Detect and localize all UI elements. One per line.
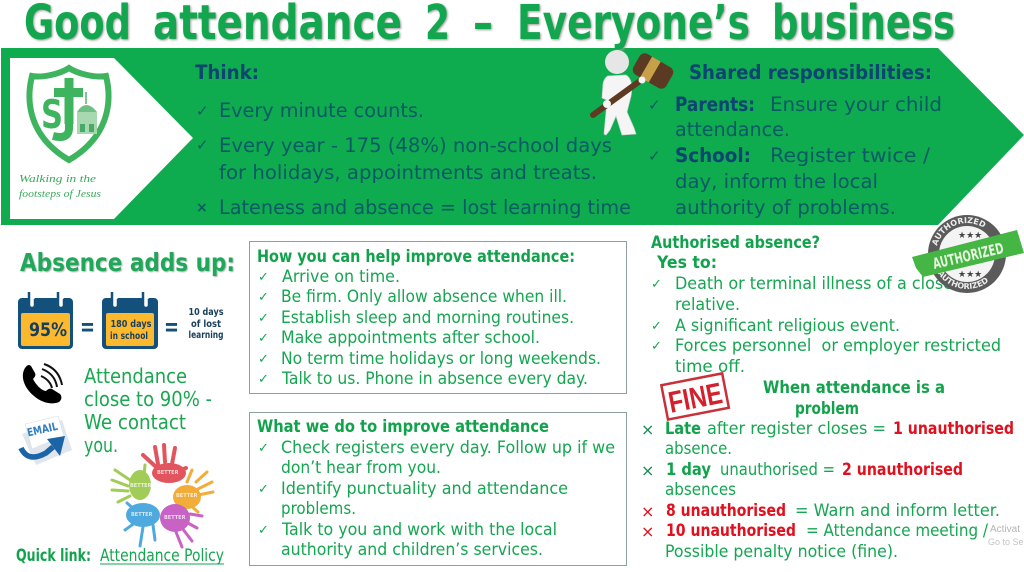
text block: problem thresholds: Possible penalty notice (fine). [665,542,898,561]
text block: think [195,61,631,219]
text: quick link: Attendance Policy [100,546,224,565]
text block: shared responsibilities: attendance. [675,118,790,141]
icon: school shield [29,68,109,160]
text block: think: Think: [195,61,259,84]
text block: authorised absence: ✓ [651,277,662,292]
panel: how you can help: Arrive on time. [282,267,400,286]
text block: attendance close to 90%: you. [84,433,118,457]
text block: think: Lateness and absence = lost learning time [219,196,631,219]
text block: attendance close to 90% [84,364,212,457]
text block: problem thresholds: 2 unauthorised [842,460,963,479]
panel: what we do: authority and children’s services. [281,540,543,559]
panel: how you can help: No term time holidays or long weekends. [281,349,601,368]
text block: authorised absence: A significant religious event. [675,316,900,335]
text: equals: = [164,312,179,341]
text block: attendance close to 90%: We contact [84,410,186,434]
text block: authorised absence: Death or terminal illness of a close [675,274,953,293]
text: quick link [16,546,224,565]
text block: shared responsibilities: ✓ [648,96,661,114]
icon: figure with gavel [593,50,675,135]
heading: what we do: What we do to improve attendance [257,417,549,436]
text block: think: Every minute counts. [219,99,424,122]
icon: colourful hands word cloud: BETTER [176,493,198,499]
text block: shared responsibilities: Ensure your child [770,93,942,116]
text block: problem thresholds: 10 unauthorised [666,521,796,540]
text block: authorised absence: relative. [675,295,740,314]
chart: calendar equation [18,292,224,349]
text: activate watermark: Go to Se [988,537,1024,547]
text block: think: for holidays, appointments and treats. [219,161,597,184]
icon: authorized badge: AUTHORIZED [938,272,988,289]
text block: problem thresholds: Late [665,419,701,438]
text block: attendance close to 90%: close to 90% - [84,387,212,411]
text block: authorised absence: Yes to: [656,253,717,272]
panel: how you can help: ✓ [258,311,269,326]
text: school motto [19,174,101,200]
icon: calendar 95%: 95% [29,319,67,341]
text block: shared responsibilities: day, inform the local [675,170,878,193]
text block: think: ✓ [196,136,209,154]
text block: problem thresholds: absence. [665,439,732,458]
text block: shared responsibilities: Parents: [675,93,755,116]
icon: authorized badge: ★★★ [958,270,982,280]
panel: what we do: problems. [281,499,356,518]
heading: when attendance is a problem: When attendance is a [763,378,945,397]
icon: calendar 95% [18,292,73,349]
text block: problem thresholds: after register closes = [707,419,886,438]
panel: school logo [10,58,193,219]
text: days of lost learning: of lost [191,319,221,330]
text block: shared responsibilities: School: [675,144,751,167]
heading: when attendance is a problem: problem [795,399,859,418]
icon: calendar 180 days [102,292,158,349]
panel: how you can help: ✓ [258,372,269,387]
panel: how you can help: ✓ [258,352,269,367]
icon: colourful hands word cloud: BETTER [131,512,153,518]
text block: shared responsibilities: authority of problems. [675,196,896,219]
panel: how you can help: Talk to us. Phone in absence every day. [281,369,588,388]
text block: authorised absence [651,233,1001,376]
text block: attendance close to 90%: Attendance [84,364,187,388]
panel: how you can help: ✓ [258,290,269,305]
icon: colourful hands word cloud: BETTER [157,470,179,476]
text block: authorised absence: ✓ [651,319,662,334]
text: days of lost learning: learning [188,330,224,341]
icon: colourful hands word cloud: BETTER [164,515,186,521]
panel: what we do: ✓ [258,523,269,538]
text block: think: ✓ [196,102,209,120]
icon: telephone [23,364,62,403]
panel: how you can help: Make appointments after school. [281,328,540,347]
text: equals: = [80,312,95,341]
panel: what we do: ✓ [258,441,269,456]
text block: problem thresholds: 1 day [666,460,711,479]
panel: what we do: Talk to you and work with the local [281,520,557,539]
text: days of lost learning [188,307,224,341]
text block: problem thresholds: × [641,522,654,541]
text block: authorised absence: time off. [675,357,745,376]
heading: how you can help: How you can help improve attendance: [257,247,575,266]
heading: absence adds up: Absence adds up: [20,248,235,277]
text block: think: Every year - 175 (48%) non-school days [219,134,612,157]
text: school motto: Walking in the [19,174,96,185]
icon: colourful hands word cloud [112,445,213,547]
icon: authorized badge [912,215,1024,293]
text block: authorised absence: Forces personnel or employer restricted [675,336,1001,355]
text block: problem thresholds: unauthorised = [720,460,835,479]
text block: problem thresholds [641,419,1014,561]
panel: how you can help: Establish sleep and morning routines. [281,308,574,327]
panel: green arrow banner [1,48,1024,225]
icon: colourful hands word cloud: BETTER [130,483,152,489]
icon: authorized badge: ★★★ [958,231,982,241]
text block: problem thresholds: × [641,420,654,439]
text block: authorised absence: ✓ [651,339,662,354]
text block: problem thresholds: absences [665,480,736,499]
text block: problem thresholds: × [641,502,654,521]
text block: shared responsibilities [648,61,942,219]
text block: shared responsibilities: Register twice / [770,144,930,167]
panel: how you can help: ✓ [258,331,269,346]
icon: authorized badge: AUTHORIZED [932,217,986,246]
text block: problem thresholds: = Attendance meeting / [806,521,988,540]
panel: how you can help: Be firm. Only allow absence when ill. [281,287,567,306]
icon: calendar 180 days: in school [110,331,148,342]
icon: email envelope: EMAIL [26,420,59,439]
panel: what we do [250,412,626,566]
panel: how you can help: ✓ [258,270,269,285]
text block: problem thresholds: = Warn and inform letter. [795,501,1000,520]
heading: when attendance is a problem [763,378,945,418]
panel: what we do: Identify punctuality and attendance [281,479,568,498]
text block: shared responsibilities: ✓ [648,147,661,165]
text block: problem thresholds: × [641,461,654,480]
title [24,0,955,51]
icon: school shield: S [41,93,63,138]
text: activate watermark [988,524,1024,547]
text block: authorised absence: Authorised absence? [651,233,820,252]
icon: calendar 180 days: 180 days [110,319,152,330]
text block: problem thresholds: 8 unauthorised [666,501,786,520]
panel: what we do: don’t hear from you. [281,458,441,477]
panel: what we do: ✓ [258,482,269,497]
text: days of lost learning: 10 days [188,307,224,318]
icon: email envelope [21,416,72,465]
text block: shared responsibilities: Shared responsibilities: [689,61,932,84]
text: school motto: footsteps of Jesus [19,189,101,200]
text block: think: × [196,200,208,216]
panel: how you can help [250,242,626,394]
text: activate watermark: Activat [990,524,1020,535]
icon: fine stamp: FINE [666,377,725,420]
text: quick link: Quick link: [16,546,91,565]
panel: what we do: Check registers every day. Follow up if we [281,438,615,457]
